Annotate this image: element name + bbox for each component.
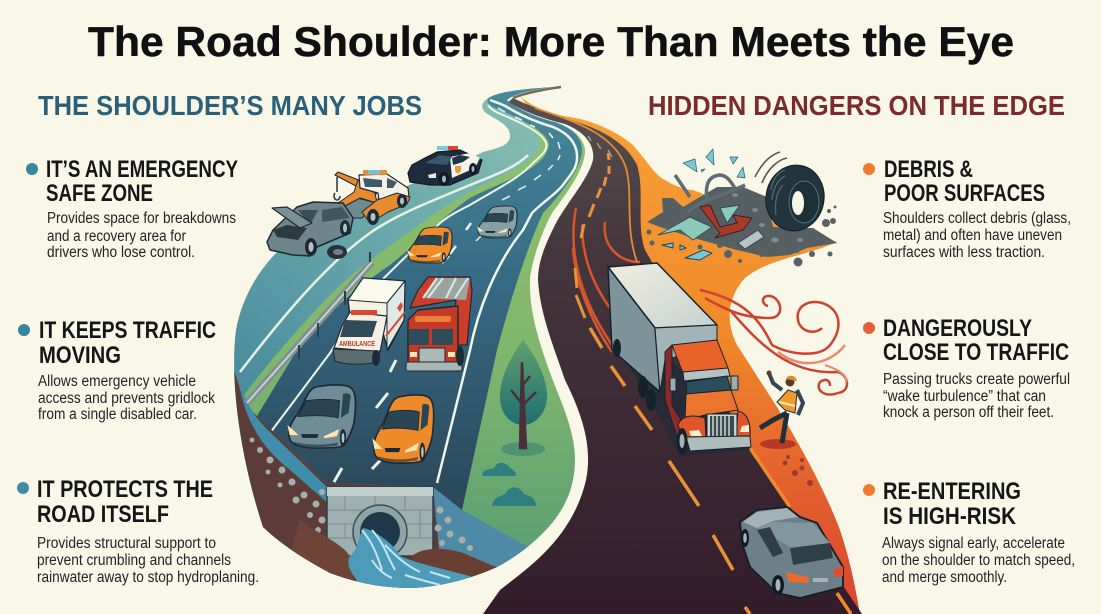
tire [761, 160, 829, 236]
text block: re-entering [863, 478, 1075, 586]
text block: keeps traffic moving: IT KEEPS TRAFFIC [39, 317, 216, 344]
text block: re-entering: IS HIGH-RISK [883, 503, 1017, 530]
text block: emergency safe zone: and a recovery area for [47, 228, 186, 245]
broken glass [658, 217, 712, 240]
water strip [238, 378, 330, 505]
text block: protects the road: prevent crumbling and channels [37, 552, 231, 569]
text block: protects the road: IT PROTECTS THE [37, 476, 213, 503]
text block: debris and poor surfaces: metal) and often have uneven [883, 227, 1062, 244]
small dark stones [782, 455, 813, 486]
text block: keeps traffic moving: MOVING [39, 342, 121, 369]
vehicle: broken-down car [267, 202, 353, 259]
text block: re-entering: on the shoulder to match speed, [882, 552, 1075, 569]
road markings and speed streaks [535, 108, 851, 614]
text block: protects the road: ROAD ITSELF [37, 501, 169, 528]
vehicle: gray car far lane [478, 206, 517, 238]
green verge [238, 114, 585, 588]
vehicle: fire truck [406, 277, 472, 371]
text block: re-entering: and merge smoothly. [882, 569, 1007, 586]
cab [665, 345, 684, 440]
cream border around teardrop [400, 100, 593, 614]
vehicle: ambulance [333, 278, 405, 366]
text block: debris and poor surfaces: Shoulders collect debris (glass, [883, 210, 1071, 227]
text block: dangerously close [863, 315, 1070, 421]
heading: the shoulder's many jobs: THE SHOULDER’S MANY JOBS [38, 90, 422, 121]
earth cutaway [234, 372, 527, 588]
vehicle: gray car lower [289, 385, 356, 448]
vehicle: gray car merging [740, 507, 843, 598]
text block: emergency safe zone: drivers who lose control. [47, 244, 195, 261]
highway lanes [257, 87, 582, 510]
text block: protects the road: Provides structural support to [37, 535, 216, 552]
text block: keeps traffic moving [18, 317, 216, 423]
text block: re-entering: Always signal early, accelerate [882, 535, 1065, 552]
title: The Road Shoulder: More Than Meets the Eye [88, 18, 1014, 65]
icon: bushes [482, 463, 536, 506]
text block: dangerously close: knock a person off their feet. [883, 404, 1054, 421]
text block: keeps traffic moving: access and prevents gridlock [38, 390, 215, 407]
text block: re-entering: RE-ENTERING [883, 478, 1021, 505]
gravel [250, 438, 473, 551]
text block: keeps traffic moving: from a single disabled car. [38, 406, 197, 423]
text block: dangerously close: “wake turbulence” that can [883, 388, 1046, 405]
text block: dangerously close: DANGEROUSLY [883, 315, 1032, 342]
vehicle: ambulance: AMBULANCE [339, 341, 375, 348]
vehicle: police car [408, 146, 482, 186]
text block: debris and poor surfaces: surfaces with less traction. [883, 244, 1045, 261]
icon: wind swirl [700, 290, 847, 395]
vehicle: orange car lower [374, 395, 434, 463]
red strip [700, 205, 752, 238]
text block: debris and poor surfaces [863, 156, 1071, 261]
panel: shoulder teardrop illustration [234, 87, 585, 588]
vehicle: orange car upper [408, 227, 452, 263]
text block: emergency safe zone [26, 156, 238, 261]
text block: debris and poor surfaces: DEBRIS & [884, 156, 973, 183]
icon: debris pile [646, 149, 837, 266]
vehicle: tow truck [334, 170, 410, 225]
text block: protects the road [17, 476, 259, 586]
text block: protects the road: rainwater away to stop hydroplaning. [37, 569, 259, 586]
water outflow [348, 528, 476, 590]
text block: emergency safe zone: SAFE ZONE [46, 180, 153, 207]
metal scrap [675, 175, 745, 212]
brown mounds [292, 520, 354, 581]
text block: dangerously close: Passing trucks create powerful [883, 371, 1070, 388]
icon: tree [500, 340, 547, 456]
shoulder white line [240, 155, 528, 372]
heading: hidden dangers: HIDDEN DANGERS ON THE EDGE [648, 90, 1065, 121]
text block: emergency safe zone: IT’S AN EMERGENCY [46, 156, 238, 183]
lane lines [270, 105, 546, 433]
text block: keeps traffic moving: Allows emergency vehicle [38, 373, 196, 390]
road tail tip [513, 87, 561, 98]
dark asphalt road [470, 98, 862, 614]
metal can [738, 230, 764, 249]
text block: debris and poor surfaces: POOR SURFACES [884, 180, 1045, 207]
guard rail [247, 252, 372, 403]
flying glass [683, 149, 745, 178]
culvert wall [327, 487, 433, 559]
trailer [608, 263, 717, 328]
vehicle: semi truck [608, 263, 751, 456]
text block: emergency safe zone: Provides space for breakdowns [47, 210, 236, 227]
icon: loose tire [327, 245, 347, 259]
worker figure [760, 370, 803, 449]
orange hazard shoulder band [520, 96, 860, 614]
